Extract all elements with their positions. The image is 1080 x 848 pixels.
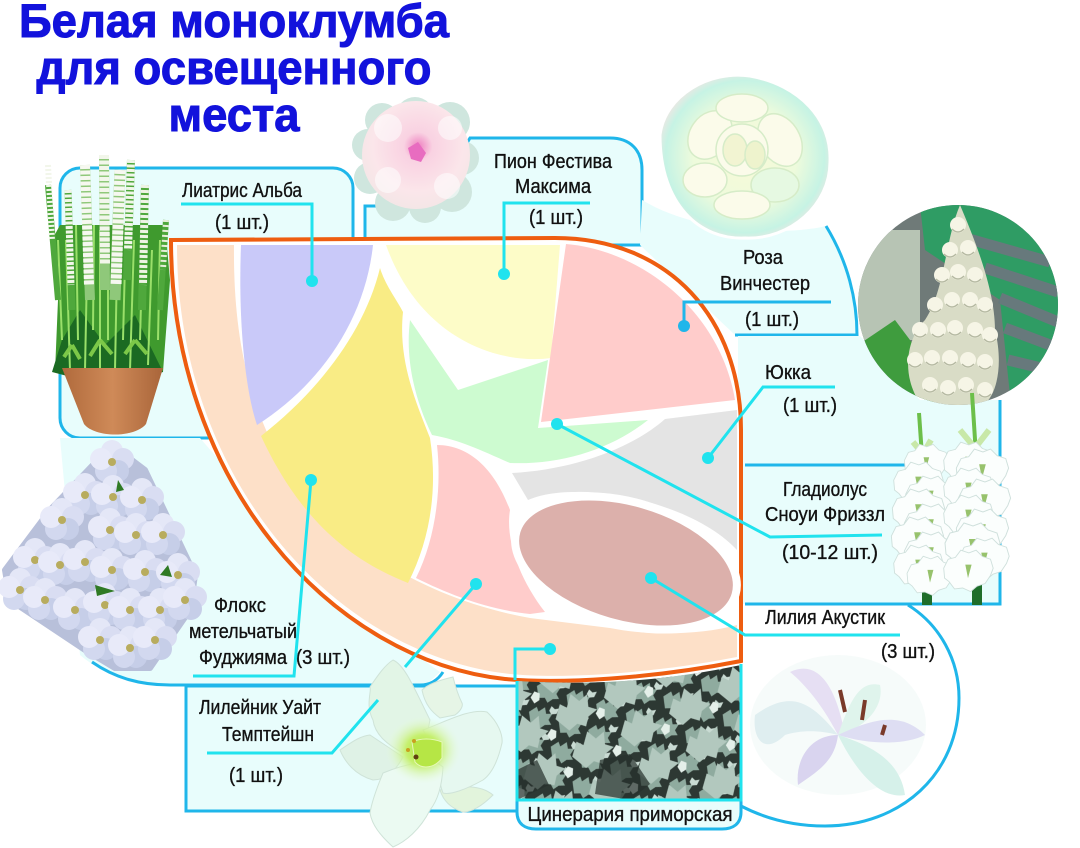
bed: daylily — [416, 445, 545, 614]
label: Rose: Роза — [743, 247, 784, 269]
label: Daylily: Лилейник Уайт — [199, 697, 321, 719]
panel: Peony — [365, 138, 642, 245]
label: Gladiolus: (10-12 шт.) — [782, 542, 878, 564]
label: Daylily: Темптейшн — [222, 724, 314, 746]
plant: liatris in pot — [48, 155, 170, 434]
bed: lily — [500, 473, 752, 653]
label: Phlox: (3 шт.) — [296, 647, 350, 669]
label: Gladiolus: Сноуи Фриззл — [765, 504, 885, 526]
label: Yucca — [702, 362, 837, 464]
plant: daylily — [340, 660, 502, 847]
bed: liatris — [240, 245, 373, 425]
label: Daylily: (1 шт.) — [229, 765, 283, 787]
gladiolus blooms — [891, 442, 1011, 595]
panel: Daylily — [186, 686, 518, 811]
plant: rose — [660, 75, 830, 238]
label: Rose — [678, 247, 831, 332]
bed: peony — [386, 245, 560, 359]
phlox panel border — [92, 662, 443, 685]
bed: phlox — [261, 268, 433, 583]
plant: lily acoustic — [750, 655, 926, 796]
label: Peony — [494, 151, 613, 280]
label: Phlox — [189, 474, 350, 676]
main flowerbed plan — [171, 238, 752, 681]
plant: cineraria photo — [517, 660, 741, 829]
label: Daylily — [199, 578, 482, 787]
label: Cineraria — [515, 643, 732, 826]
label: Lily — [645, 572, 935, 663]
gladiolus stems — [919, 393, 976, 470]
panel: Phlox — [60, 438, 440, 686]
plant: gladiolus — [891, 393, 1011, 605]
label: Phlox: Фуджияма — [199, 647, 288, 669]
label: Gladiolus — [551, 418, 885, 564]
label: Lily: (3 шт.) — [881, 641, 935, 663]
label: Peony: Максима — [515, 176, 592, 198]
title: места — [168, 88, 300, 141]
label: Liatris: Лиатрис Альба — [182, 180, 303, 202]
bed: cineraria band — [177, 245, 737, 676]
foliage — [52, 225, 170, 372]
label: Liatris — [181, 180, 318, 287]
panel: Lily Acoustic — [741, 605, 959, 826]
label: Phlox: метельчатый — [189, 621, 297, 643]
bed: gladiolus — [409, 320, 648, 463]
title — [19, 0, 450, 141]
plant: yucca photo — [858, 205, 1060, 410]
yucca panel border — [745, 400, 1000, 604]
title: для освещенного — [36, 41, 432, 94]
label: Yucca: Юкка — [765, 362, 812, 384]
label: Peony: (1 шт.) — [529, 207, 583, 229]
plant: phlox — [0, 440, 207, 668]
panel: Liatris — [60, 168, 353, 438]
label: Gladiolus: Гладиолус — [783, 479, 867, 501]
label: Phlox: Флокс — [214, 595, 266, 617]
label: Lily: Лилия Акустик — [765, 607, 885, 629]
label: Yucca: (1 шт.) — [783, 395, 837, 417]
bed outline — [171, 238, 741, 681]
panel: Yucca and Gladiolus — [738, 336, 1000, 604]
plant: peony — [352, 97, 479, 223]
label: Rose: Винчестер — [720, 273, 810, 295]
pot — [62, 368, 163, 434]
label: Peony: Пион Фестива — [494, 151, 613, 173]
label: Cineraria: Цинерария приморская — [528, 804, 732, 826]
bed: rose — [541, 244, 735, 422]
label: Liatris: (1 шт.) — [215, 212, 269, 234]
rose panel border — [735, 226, 857, 335]
label: Rose: (1 шт.) — [745, 309, 799, 331]
white flower spikes — [48, 155, 166, 310]
panel: Rose — [640, 200, 857, 335]
bed: yucca — [512, 410, 737, 550]
